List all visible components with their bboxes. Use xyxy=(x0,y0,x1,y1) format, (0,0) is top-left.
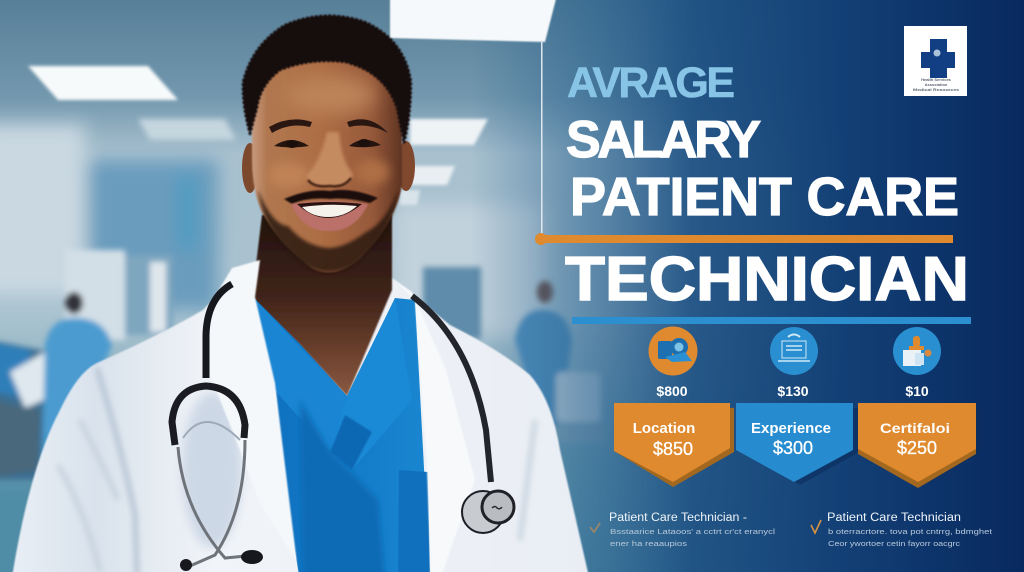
person: healthcare technician xyxy=(10,16,592,572)
factor: location: $850 xyxy=(653,439,693,459)
factor: experience: $300 xyxy=(773,438,813,458)
forehead highlight xyxy=(285,75,375,115)
logo badge: Health Services xyxy=(921,77,952,82)
moustache xyxy=(284,190,378,204)
nose xyxy=(306,132,353,186)
logo badge: Medical Resources xyxy=(913,87,960,92)
beard xyxy=(258,190,399,272)
factor: experience: Experience xyxy=(751,420,831,437)
logo badge xyxy=(904,26,967,96)
white coat xyxy=(10,260,592,572)
factor: location: Location xyxy=(633,420,695,437)
heading: patient care: PATIENT CARE xyxy=(570,167,959,227)
note: right: b oterracrtore. tova pot cntrrg, bdmghet xyxy=(828,527,993,536)
navy gradient overlay xyxy=(470,0,1024,572)
note: right xyxy=(811,512,993,548)
note: left: Bsstaarice Lataoos' a cctrt cr'ct eranycl xyxy=(610,527,775,536)
factor: location xyxy=(614,326,734,487)
title block xyxy=(535,42,971,324)
icon: certificate board xyxy=(770,327,818,375)
ceiling lights xyxy=(28,0,557,205)
coat folds xyxy=(58,368,535,572)
heading: average: AVRAGE xyxy=(567,59,735,107)
icon: check xyxy=(590,523,600,532)
note: left xyxy=(590,512,775,548)
arrow card xyxy=(864,408,982,486)
face and head xyxy=(242,16,415,272)
neck xyxy=(252,215,392,396)
stethoscope chest piece xyxy=(462,491,514,533)
icon: location search xyxy=(648,326,698,376)
eyes and brows xyxy=(269,119,312,133)
smile xyxy=(291,201,368,231)
amount: $130 xyxy=(777,383,809,399)
arrow card xyxy=(614,403,734,487)
logo badge: Association xyxy=(925,82,948,87)
amount: $10 xyxy=(905,383,929,399)
heading: technician: TECHNICIAN xyxy=(565,245,969,314)
note: left: ener ha reaaupios xyxy=(610,539,687,548)
heading: salary: SALARY xyxy=(566,111,761,169)
arrow card xyxy=(742,408,859,485)
amount: $800 xyxy=(656,383,688,399)
orange divider xyxy=(535,233,953,245)
hair xyxy=(243,16,411,143)
blue scrubs xyxy=(252,296,430,572)
factor: certification: $250 xyxy=(897,438,937,458)
stethoscope xyxy=(172,284,491,571)
factor: experience xyxy=(736,327,859,485)
factor: certification: Certifaloi xyxy=(880,421,950,436)
note: left: Patient Care Technician - xyxy=(609,512,747,524)
factor: certification xyxy=(858,327,982,488)
note: right: Patient Care Technician xyxy=(827,512,961,524)
note: right: Ceor ywortoer cetin fayorr oacgrc xyxy=(828,539,960,548)
vertical rule xyxy=(541,42,542,235)
icon: check xyxy=(811,520,821,533)
blue divider xyxy=(572,317,971,324)
icon: certification document xyxy=(893,327,941,375)
coat lapels xyxy=(204,260,298,572)
